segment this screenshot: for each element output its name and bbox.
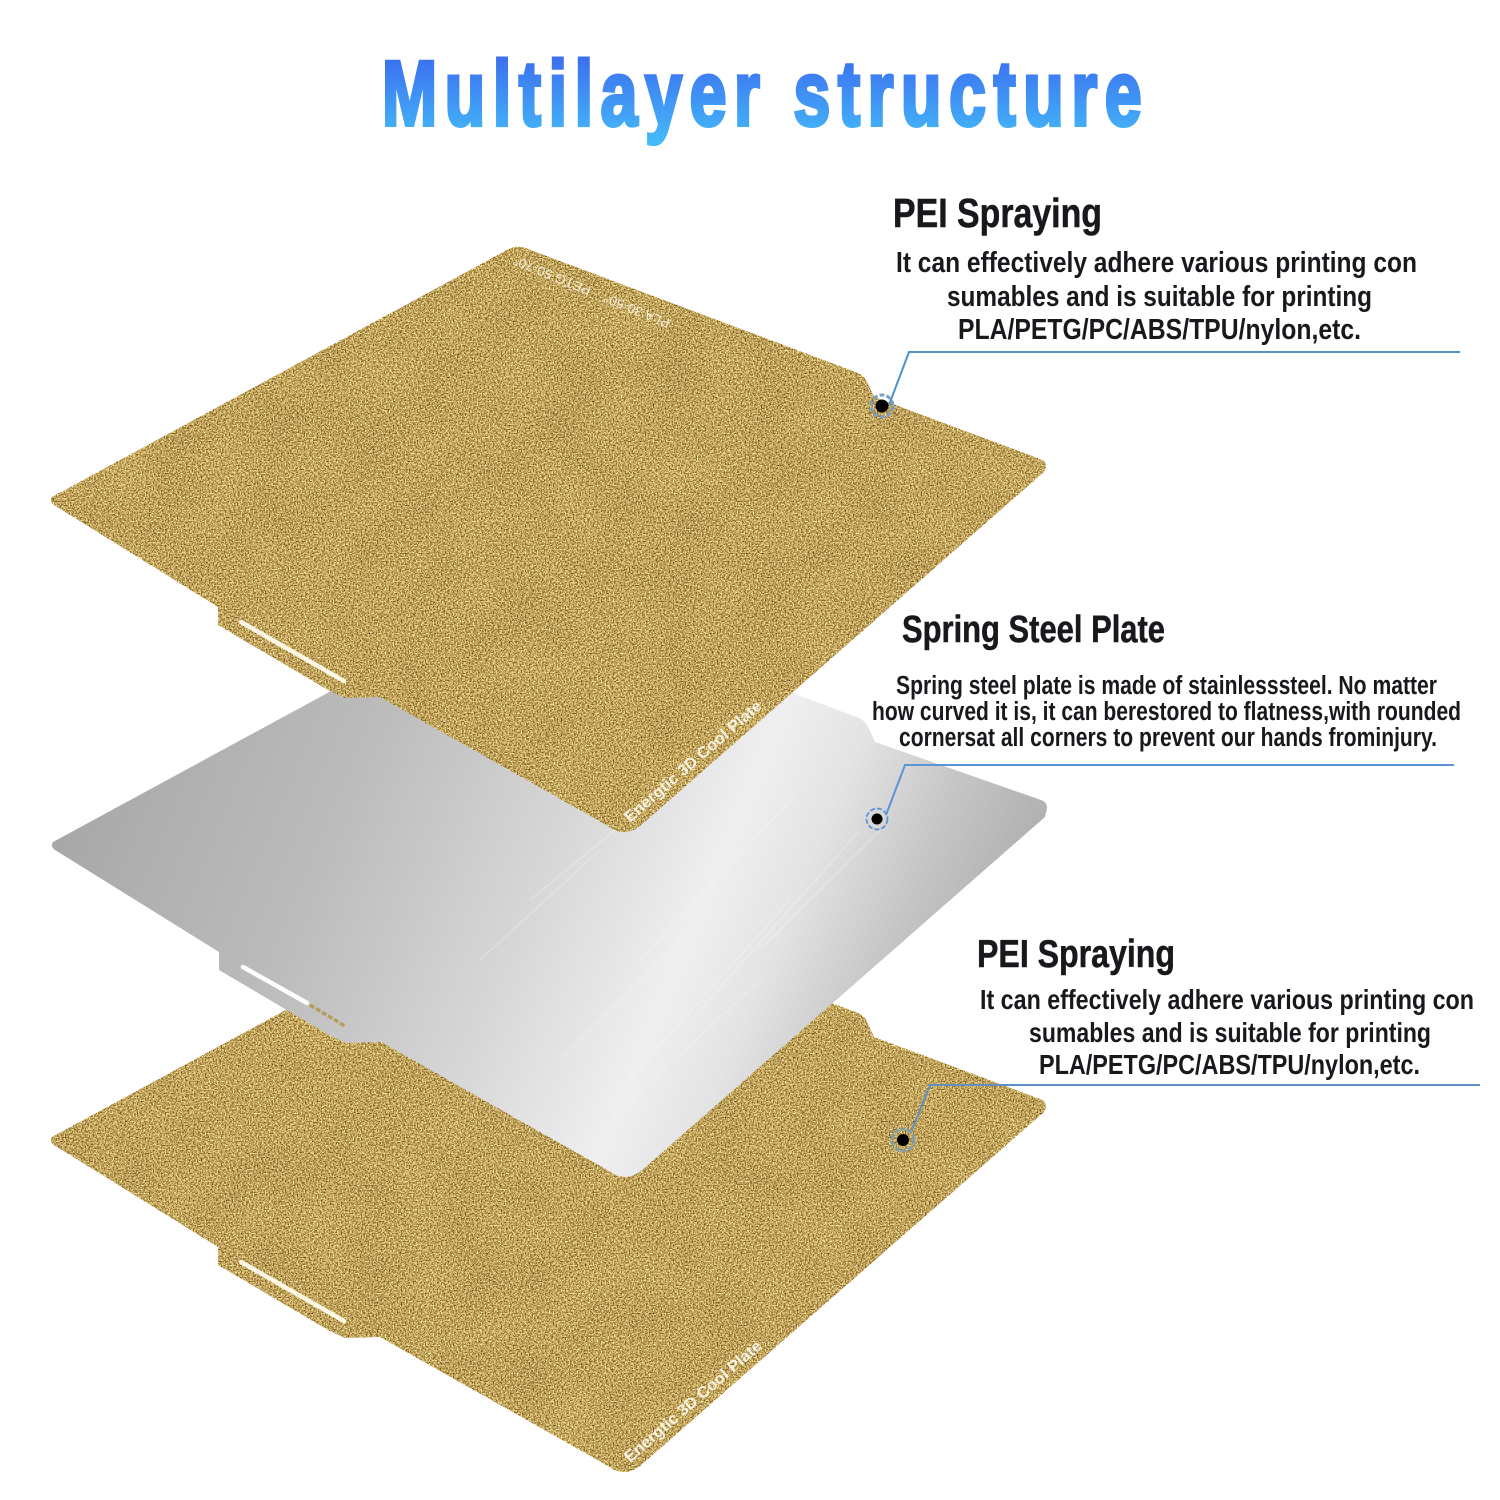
bottom plate printed label: Energtic 3D Cool Plate — [621, 1338, 766, 1466]
slot showing gold sheet through — [310, 1005, 345, 1026]
heading: PEI Spraying — [893, 190, 1102, 236]
description — [896, 247, 1417, 346]
leader line — [886, 765, 1454, 815]
leader line — [889, 352, 1460, 405]
callout: spring steel plate — [866, 609, 1461, 830]
title: Multilayer structure — [382, 41, 1142, 145]
description: sumables and is suitable for printing — [1029, 1017, 1431, 1048]
top plate temperature label: PLA 30-50° PETG 50-70° — [511, 253, 672, 331]
heading: PEI Spraying — [977, 933, 1175, 976]
marker dot — [892, 1129, 914, 1151]
description: PLA/PETG/PC/ABS/TPU/nylon,etc. — [1039, 1049, 1420, 1080]
plate: spring steel sheet — [52, 592, 1047, 1177]
plate: top PEI gold sheet — [51, 247, 1046, 832]
heading: Spring Steel Plate — [902, 609, 1165, 651]
plate: bottom PEI gold sheet — [51, 887, 1046, 1472]
brushed metal streaks — [480, 760, 880, 1130]
description: It can effectively adhere various printing con — [896, 247, 1417, 279]
steel plate slot — [243, 967, 307, 1003]
description: sumables and is suitable for printing — [947, 281, 1372, 313]
leader line — [912, 1085, 1480, 1130]
description: PLA/PETG/PC/ABS/TPU/nylon,etc. — [958, 314, 1361, 346]
callout: top PEI spraying — [871, 190, 1460, 417]
top plate printed label: Energtic 3D Cool Plate — [621, 698, 766, 826]
top plate slot — [241, 622, 344, 681]
marker dot — [866, 808, 888, 830]
description — [872, 672, 1461, 752]
marker dot — [871, 395, 893, 417]
bottom plate slot — [241, 1262, 344, 1321]
callout: bottom PEI spraying — [892, 933, 1480, 1151]
description — [980, 984, 1474, 1080]
